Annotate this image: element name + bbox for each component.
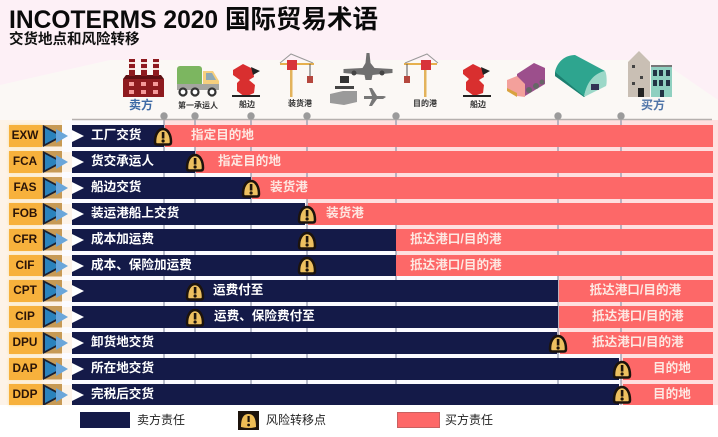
label: destination port: 目的港 — [413, 99, 437, 108]
row: DDP: 完税后交货 — [91, 387, 154, 401]
row: CFR: 抵达港口/目的港 — [410, 232, 502, 246]
row: CFR: CFR — [13, 232, 37, 246]
row: CPT: CPT — [13, 283, 37, 297]
legend: buyer responsibility — [397, 412, 493, 428]
legend: risk transfer point: 风险转移点 — [266, 413, 326, 427]
row: FCA: 指定目的地 — [218, 154, 281, 168]
row: FAS: FAS — [14, 180, 36, 194]
row: DPU: 抵达港口/目的港 — [592, 335, 684, 349]
icon: crane destination port — [404, 54, 438, 97]
seller label: 卖方 — [129, 98, 153, 112]
row: FOB: 装运港船上交货 — [91, 206, 179, 220]
icon: ship side 2 — [463, 64, 491, 97]
row: DDP: 目的地 — [653, 387, 691, 401]
buyer label: 买方 — [641, 98, 665, 112]
row: CPT — [7, 278, 713, 304]
row: FOB: 装货港 — [326, 206, 364, 220]
label: ship side destination: 船边 — [470, 100, 486, 109]
label: loading port: 装货港 — [288, 99, 312, 108]
title: INCOTERMS 2020 国际贸易术语 — [9, 6, 378, 34]
icon: factory — [123, 59, 164, 97]
label: ship side: 船边 — [239, 100, 255, 109]
legend: seller responsibility: 卖方责任 — [137, 413, 185, 427]
icon: truck — [177, 66, 219, 96]
row: FAS — [7, 175, 713, 201]
row: FOB — [7, 201, 713, 227]
row: DAP: DAP — [13, 361, 37, 375]
row: FCA — [7, 149, 713, 175]
row: CIF: CIF — [15, 258, 34, 272]
icon: ship and planes — [330, 53, 392, 106]
row: EXW: 指定目的地 — [191, 128, 254, 142]
icon: ship side 1 — [232, 64, 260, 97]
row: CFR — [7, 227, 713, 253]
row: FCA: FCA — [13, 154, 37, 168]
row: EXW — [7, 123, 713, 149]
icon: crane loading port — [280, 54, 314, 97]
row: CPT: 运费付至 — [213, 283, 263, 297]
row: DPU: 卸货地交货 — [91, 335, 154, 349]
row: CPT: 抵达港口/目的港 — [590, 283, 681, 297]
row: FAS: 船边交货 — [91, 180, 141, 194]
row: CIP — [7, 304, 713, 330]
row: DPU: DPU — [13, 335, 37, 349]
row: CIF — [7, 253, 713, 278]
row: CIP: 抵达港口/目的港 — [592, 309, 684, 323]
row: DAP: 所在地交货 — [91, 361, 154, 375]
icon: warehouse — [555, 55, 607, 97]
subtitle: 交货地点和风险转移 — [9, 32, 140, 48]
row: FCA: 货交承运人 — [91, 154, 154, 168]
row: DDP: DDP — [13, 387, 37, 401]
legend: risk transfer point — [238, 411, 326, 430]
icon: delivery truck — [507, 63, 545, 97]
icon: buyer buildings — [628, 51, 672, 97]
row: DDP — [7, 382, 713, 407]
icons strip — [123, 51, 672, 106]
row: EXW: 工厂交货 — [91, 128, 141, 142]
row: CIF: 成本、保险加运费 — [91, 258, 192, 272]
row: FOB: FOB — [13, 206, 37, 220]
row: CIP: 运费、保险费付至 — [214, 309, 315, 323]
row: EXW: EXW — [12, 128, 38, 142]
row: CIP: CIP — [15, 309, 35, 323]
row: CFR: 成本加运费 — [91, 232, 154, 246]
row: CIF: 抵达港口/目的港 — [410, 258, 502, 272]
row: DPU — [7, 330, 713, 356]
legend: buyer responsibility: 买方责任 — [445, 413, 493, 427]
legend: seller responsibility — [80, 412, 185, 428]
label: first carrier: 第一承运人 — [178, 101, 218, 110]
row: FAS: 装货港 — [270, 180, 308, 194]
row: DAP: 目的地 — [653, 361, 691, 375]
row: DAP — [7, 356, 713, 382]
